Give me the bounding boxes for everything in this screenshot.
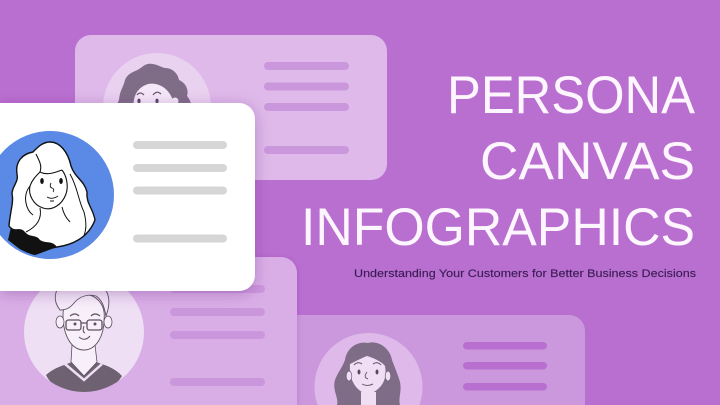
avatar: curly-haired woman	[103, 53, 211, 103]
avatar: woman with wavy hair on blue circle	[0, 131, 114, 259]
title: PERSONA	[447, 66, 696, 125]
avatar: long-haired woman	[314, 333, 422, 405]
text lines	[170, 285, 265, 386]
title: CANVAS	[480, 132, 695, 191]
title	[301, 66, 696, 257]
panel: bottom right persona card	[290, 315, 585, 405]
panel: top persona card	[75, 35, 387, 180]
title: INFOGRAPHICS	[301, 198, 695, 257]
text lines	[133, 141, 227, 242]
panel: highlighted white persona card	[0, 103, 255, 291]
text lines	[463, 342, 547, 390]
panel: bottom left persona card	[0, 257, 297, 405]
text lines	[264, 62, 349, 154]
avatar: man with glasses	[24, 291, 144, 392]
subtitle: Understanding Your Customers for Better Business Decisions	[354, 268, 697, 280]
